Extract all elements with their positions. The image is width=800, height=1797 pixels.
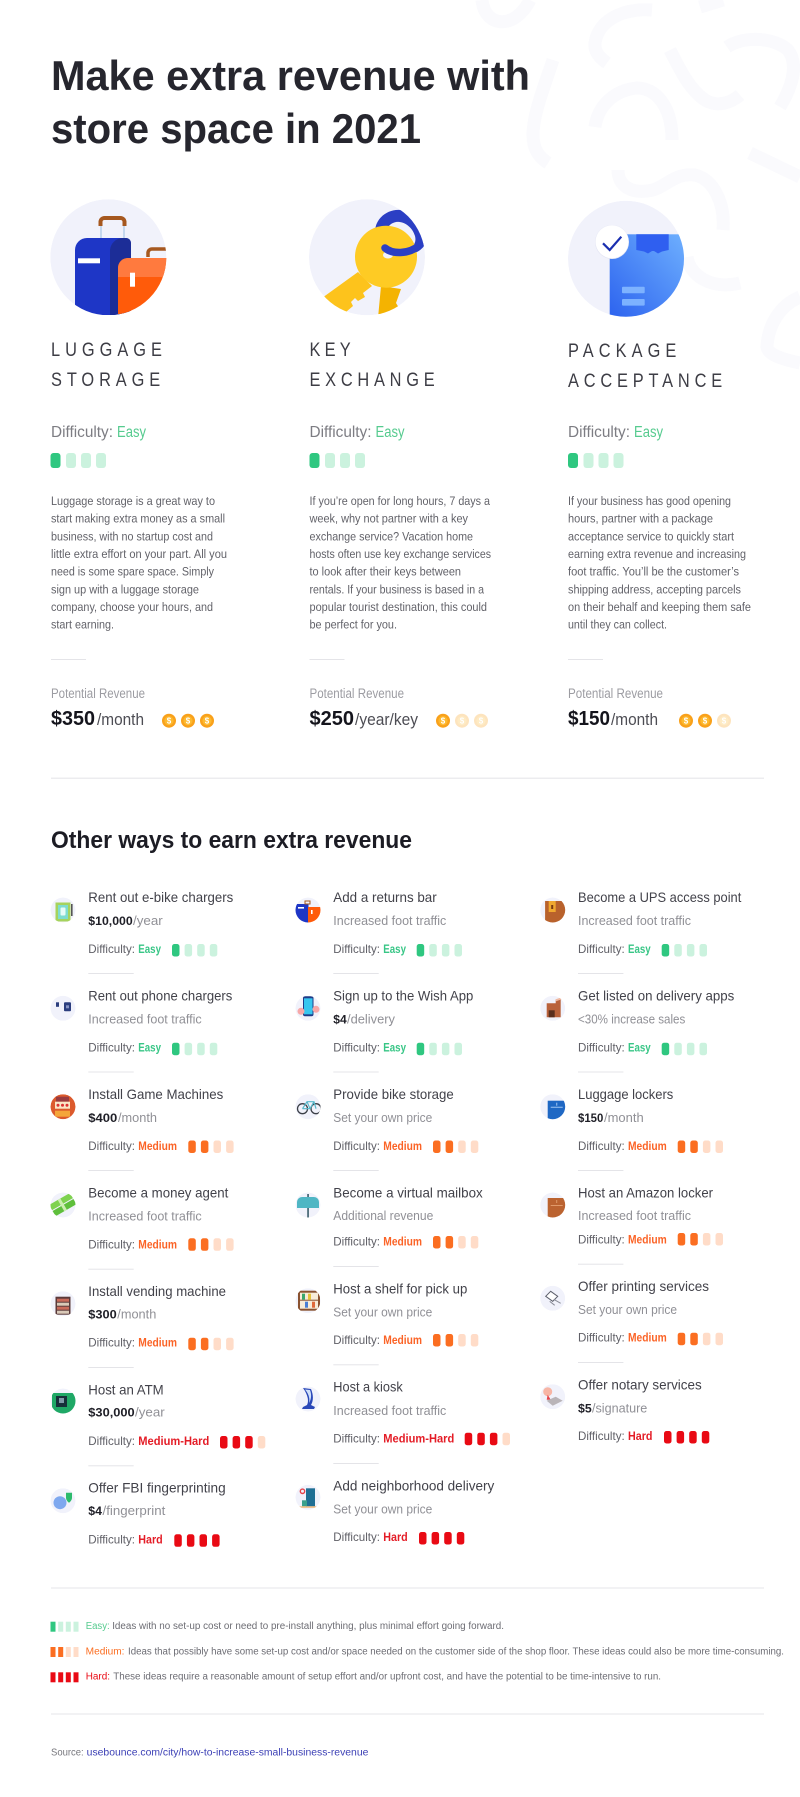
- item: Rent out phone chargers: Easy: [138, 1043, 162, 1055]
- difficulty label: Difficulty:: [51, 424, 113, 441]
- item: Get listed on delivery apps: Get listed on delivery apps: [578, 988, 734, 1004]
- item: Rent out e-bike chargers: /year: [133, 914, 163, 928]
- description: If your business has good opening: [568, 494, 731, 508]
- icon: phone charger: [50, 996, 76, 1021]
- heading: other ways: Other ways to earn extra revenue: [51, 827, 412, 854]
- description: exchange service? Vacation home: [310, 529, 473, 543]
- item: Provide bike storage: Medium: [383, 1141, 422, 1153]
- item: Host a kiosk: Host a kiosk: [333, 1379, 404, 1395]
- icon: Amazon locker: [540, 1192, 566, 1218]
- item: Offer notary services: Hard: [628, 1431, 652, 1443]
- icon: fingerprint: [50, 1488, 76, 1513]
- coins: [679, 714, 731, 728]
- item: Rent out e-bike chargers: Easy: [138, 944, 162, 956]
- icon: game machine: [50, 1094, 76, 1119]
- item: Install Game Machines: $400: [88, 1111, 117, 1125]
- item: Offer printing services: Offer printing services: [578, 1278, 709, 1294]
- item: Offer notary services: /signature: [592, 1401, 647, 1415]
- item: Rent out e-bike chargers: Difficulty:: [88, 942, 135, 956]
- item: Install Game Machines: /month: [118, 1111, 157, 1125]
- title: Make extra revenue with: [51, 52, 530, 99]
- icon: charger: [50, 898, 76, 922]
- item: Offer printing services: Medium: [628, 1333, 667, 1345]
- item: Offer notary services: [540, 1376, 709, 1444]
- item: Host an ATM: $30,000: [88, 1406, 135, 1420]
- item: Install Game Machines: Medium: [138, 1141, 177, 1153]
- coins: $: [722, 716, 727, 726]
- item: Offer notary services: $5: [578, 1401, 592, 1415]
- item: Get listed on delivery apps: <30% increase sales: [578, 1012, 685, 1026]
- item: Add neighborhood delivery: Difficulty:: [333, 1530, 380, 1544]
- difficulty label: [51, 424, 146, 441]
- item: Become a virtual mailbox: Additional revenue: [333, 1209, 433, 1223]
- item: Add neighborhood delivery: Add neighborhood delivery: [333, 1477, 494, 1493]
- item: Rent out e-bike chargers: Rent out e-bike chargers: [88, 889, 233, 905]
- heading: ACCEPTANCE: [568, 370, 722, 391]
- item: Rent out phone chargers: [50, 988, 232, 1072]
- item: Luggage lockers: /month: [604, 1111, 644, 1125]
- difficulty label: [568, 424, 663, 441]
- item: Sign up to the Wish App: Difficulty:: [333, 1041, 380, 1055]
- icon: bicycle: [296, 1094, 321, 1119]
- item: Host an ATM: Medium-Hard: [138, 1436, 209, 1448]
- item: Offer notary services: Offer notary services: [578, 1376, 702, 1392]
- item: Sign up to the Wish App: /delivery: [347, 1012, 396, 1026]
- item: Add neighborhood delivery: [296, 1477, 494, 1544]
- item: Offer FBI fingerprinting: [50, 1480, 226, 1547]
- item: Provide bike storage: Provide bike storage: [333, 1086, 454, 1102]
- item: Rent out phone chargers: Rent out phone chargers: [88, 988, 232, 1004]
- potential revenue: $350: [51, 708, 95, 730]
- item: Host an Amazon locker: Increased foot traffic: [578, 1209, 691, 1223]
- item: Host an Amazon locker: Host an Amazon locker: [578, 1185, 713, 1201]
- coins: $: [441, 716, 446, 726]
- description: earning extra revenue and increasing: [568, 547, 746, 561]
- description: until they can collect.: [568, 618, 667, 632]
- icon: ATM: [50, 1388, 76, 1414]
- potential revenue: [51, 686, 214, 730]
- item: Host a shelf for pick up: [296, 1280, 478, 1365]
- item: Add a returns bar: Easy: [383, 944, 407, 956]
- icon: phone app: [296, 996, 320, 1021]
- item: Host an Amazon locker: Difficulty:: [578, 1232, 625, 1246]
- potential revenue: Potential Revenue: [51, 686, 145, 701]
- description: Luggage storage is a great way to: [51, 494, 215, 508]
- potential revenue: $250: [310, 708, 354, 730]
- item: Luggage lockers: Medium: [628, 1141, 667, 1153]
- icon: luggage: [50, 199, 168, 315]
- coins: $: [684, 716, 689, 726]
- heading: [568, 340, 722, 391]
- icon: keys: [309, 199, 425, 318]
- difficulty meter: [50, 453, 106, 468]
- item: Become a virtual mailbox: Medium: [383, 1237, 422, 1249]
- icon: shelf: [296, 1288, 320, 1313]
- legend: medium: Ideas that possibly have some set-up cost and/or space needed on the customer side of the shop floor. These ideas could also be more time-consuming.: [128, 1646, 784, 1657]
- item: Become a virtual mailbox: Difficulty:: [333, 1235, 380, 1249]
- item: Sign up to the Wish App: [296, 988, 473, 1072]
- description: need is some spare space. Simply: [51, 565, 215, 579]
- item: Offer FBI fingerprinting: $4: [88, 1504, 102, 1518]
- potential revenue: [310, 686, 488, 730]
- icon: package: [568, 201, 684, 317]
- item: Rent out phone chargers: Increased foot traffic: [88, 1012, 202, 1026]
- item: Host a kiosk: [296, 1379, 510, 1464]
- icon: vending machine: [50, 1291, 76, 1316]
- item: Become a UPS access point: Difficulty:: [578, 942, 625, 956]
- item: Offer notary services: Difficulty:: [578, 1429, 625, 1443]
- description: [309, 494, 491, 632]
- item: Become a virtual mailbox: [296, 1185, 483, 1267]
- item: Offer FBI fingerprinting: /fingerprint: [102, 1504, 166, 1518]
- item: Become a UPS access point: Easy: [628, 944, 651, 956]
- panel: key exchange: [309, 199, 491, 730]
- item: Add a returns bar: Add a returns bar: [333, 889, 437, 905]
- item: Host a kiosk: Medium-Hard: [383, 1434, 454, 1446]
- coins: $: [167, 716, 172, 726]
- item: Offer FBI fingerprinting: Hard: [138, 1534, 163, 1546]
- description: shipping address, accepting parcels: [568, 582, 741, 596]
- difficulty label: Easy: [634, 424, 663, 441]
- potential revenue: Potential Revenue: [568, 686, 663, 701]
- icon: returns bar: [296, 898, 321, 923]
- description: foot traffic. You’ll be the customer’s: [568, 565, 739, 579]
- item: Install vending machine: /month: [117, 1307, 156, 1321]
- item: Host a shelf for pick up: Set your own price: [333, 1306, 432, 1320]
- icon: money: [49, 1192, 76, 1218]
- description: start making extra money as a small: [51, 512, 225, 526]
- item: Become a UPS access point: [540, 889, 741, 974]
- icon: notary: [540, 1384, 565, 1409]
- item: Become a money agent: [49, 1185, 234, 1270]
- legend: medium: Medium:: [86, 1646, 124, 1657]
- description: hours, partner with a package: [568, 512, 713, 526]
- coins: $: [186, 716, 191, 726]
- description: company, choose your hours, and: [51, 600, 213, 614]
- item: Host a shelf for pick up: Host a shelf for pick up: [333, 1280, 467, 1296]
- item: Host an ATM: /year: [135, 1406, 165, 1420]
- heading: STORAGE: [51, 369, 160, 390]
- heading: [310, 339, 435, 390]
- item: Luggage lockers: $150: [578, 1111, 603, 1125]
- coins: $: [479, 716, 484, 726]
- legend: hard: Hard:: [86, 1672, 110, 1683]
- potential revenue: /year/key: [355, 711, 419, 729]
- icon: UPS box: [540, 898, 566, 923]
- item: Add neighborhood delivery: Set your own price: [333, 1502, 432, 1516]
- panel: package acceptance: [568, 201, 751, 730]
- item: Luggage lockers: Difficulty:: [578, 1139, 625, 1153]
- item: Rent out phone chargers: Difficulty:: [88, 1041, 135, 1055]
- item: Host an Amazon locker: Medium: [628, 1234, 667, 1246]
- item: Become a virtual mailbox: Become a virtual mailbox: [333, 1185, 483, 1201]
- item: Sign up to the Wish App: Easy: [383, 1043, 407, 1055]
- item: Host a kiosk: Increased foot traffic: [333, 1404, 446, 1418]
- item: Provide bike storage: Difficulty:: [333, 1139, 380, 1153]
- description: little extra effort on your part. All you: [51, 547, 227, 561]
- source: usebounce.com/city/how-to-increase-small-business-revenue: [87, 1747, 369, 1758]
- item: Become a money agent: Become a money agent: [88, 1185, 228, 1201]
- item: Host a kiosk: Difficulty:: [333, 1432, 380, 1446]
- heading: [51, 339, 162, 390]
- description: popular tourist destination, this could: [310, 600, 487, 614]
- coins: $: [703, 716, 708, 726]
- item: Get listed on delivery apps: Easy: [628, 1043, 651, 1055]
- description: hosts often use key exchange services: [310, 547, 491, 561]
- difficulty label: Difficulty:: [568, 424, 630, 441]
- icon: lockers: [540, 1094, 566, 1120]
- source: Source:: [51, 1747, 84, 1758]
- item: Host an ATM: [50, 1381, 265, 1466]
- description: start earning.: [51, 618, 114, 632]
- coins: [436, 714, 488, 728]
- item: Provide bike storage: Set your own price: [333, 1111, 432, 1125]
- potential revenue: /month: [611, 711, 658, 729]
- potential revenue: /month: [97, 711, 144, 729]
- difficulty label: Easy: [117, 424, 146, 441]
- item: Provide bike storage: [296, 1086, 478, 1171]
- item: Host an ATM: Host an ATM: [88, 1381, 164, 1397]
- legend: [50, 1621, 784, 1683]
- icon: delivery bag: [540, 996, 565, 1021]
- item: Install vending machine: $300: [88, 1307, 117, 1321]
- item: Get listed on delivery apps: Difficulty:: [578, 1041, 625, 1055]
- item: Host an ATM: Difficulty:: [88, 1434, 135, 1448]
- item: Become a UPS access point: Become a UPS access point: [578, 889, 741, 905]
- panel: luggage storage: [50, 199, 227, 730]
- description: week, why not partner with a key: [309, 512, 469, 526]
- item: Add a returns bar: Difficulty:: [333, 942, 380, 956]
- description: sign up with a luggage storage: [51, 582, 199, 596]
- legend: easy: Easy:: [86, 1621, 110, 1632]
- coins: $: [460, 716, 465, 726]
- description: [568, 494, 751, 632]
- item: Offer printing services: Set your own price: [578, 1303, 677, 1317]
- difficulty label: Difficulty:: [310, 424, 372, 441]
- potential revenue: Potential Revenue: [310, 686, 404, 701]
- item: Install Game Machines: Difficulty:: [88, 1139, 135, 1153]
- legend: easy: Ideas with no set-up cost or need to pre-install anything, plus minimal effort going forward.: [112, 1621, 504, 1632]
- item: Get listed on delivery apps: [540, 988, 734, 1072]
- heading: LUGGAGE: [51, 339, 162, 360]
- description: [51, 494, 227, 632]
- description: business, with no startup cost and: [51, 529, 213, 543]
- item: Luggage lockers: Luggage lockers: [578, 1086, 673, 1102]
- description: be perfect for you.: [310, 618, 397, 632]
- item: Become a money agent: Increased foot traffic: [88, 1210, 202, 1224]
- item: Add neighborhood delivery: Hard: [383, 1532, 408, 1544]
- title: [51, 52, 530, 152]
- item: Offer printing services: [540, 1278, 723, 1363]
- item: Sign up to the Wish App: $4: [333, 1012, 347, 1026]
- coins: $: [205, 716, 210, 726]
- item: Install vending machine: Medium: [138, 1338, 177, 1350]
- coins: [162, 714, 214, 728]
- difficulty label: [310, 424, 405, 441]
- description: to look after their keys between: [310, 565, 461, 579]
- icon: kiosk: [296, 1386, 320, 1412]
- title: store space in 2021: [51, 105, 421, 152]
- item: Add a returns bar: [296, 889, 462, 974]
- item: Install vending machine: Difficulty:: [88, 1336, 135, 1350]
- item: Offer FBI fingerprinting: Offer FBI fingerprinting: [88, 1480, 226, 1496]
- icon: mailbox: [296, 1192, 320, 1218]
- item: Install Game Machines: [50, 1086, 234, 1171]
- item: Become a money agent: Difficulty:: [88, 1237, 135, 1251]
- item: Install vending machine: [50, 1283, 234, 1368]
- difficulty meter: [568, 453, 624, 468]
- item: Rent out e-bike chargers: [50, 889, 233, 974]
- item: Install vending machine: Install vending machine: [88, 1283, 226, 1299]
- description: rentals. If your business is based in a: [310, 582, 484, 596]
- item: Offer FBI fingerprinting: Difficulty:: [88, 1532, 135, 1546]
- potential revenue: [568, 686, 731, 730]
- item: Become a money agent: Medium: [138, 1239, 177, 1251]
- potential revenue: $150: [568, 708, 610, 730]
- item: Rent out e-bike chargers: $10,000: [88, 914, 133, 928]
- heading: KEY: [310, 339, 351, 360]
- description: If you’re open for long hours, 7 days a: [310, 494, 490, 508]
- item: Host a shelf for pick up: Difficulty:: [333, 1333, 380, 1347]
- item: Become a UPS access point: Increased foot traffic: [578, 914, 691, 928]
- item: Add a returns bar: Increased foot traffic: [333, 914, 446, 928]
- icon: delivery door: [296, 1485, 320, 1510]
- item: Luggage lockers: [540, 1086, 723, 1171]
- item: Install Game Machines: Install Game Machines: [88, 1086, 223, 1102]
- icon: printing: [540, 1286, 565, 1311]
- description: on their behalf and keeping them safe: [568, 600, 751, 614]
- item: Offer printing services: Difficulty:: [578, 1331, 625, 1345]
- heading: PACKAGE: [568, 340, 676, 361]
- legend: hard: These ideas require a reasonable amount of setup effort and/or upfront cost, and have the potential to be time-intensive to run.: [113, 1672, 661, 1683]
- item: Host a shelf for pick up: Medium: [383, 1335, 422, 1347]
- item: Sign up to the Wish App: Sign up to the Wish App: [333, 988, 473, 1004]
- description: acceptance service to quickly start: [568, 529, 735, 543]
- difficulty label: Easy: [376, 424, 405, 441]
- difficulty meter: [310, 453, 365, 468]
- heading: EXCHANGE: [310, 369, 435, 390]
- item: Host an Amazon locker: [540, 1185, 723, 1265]
